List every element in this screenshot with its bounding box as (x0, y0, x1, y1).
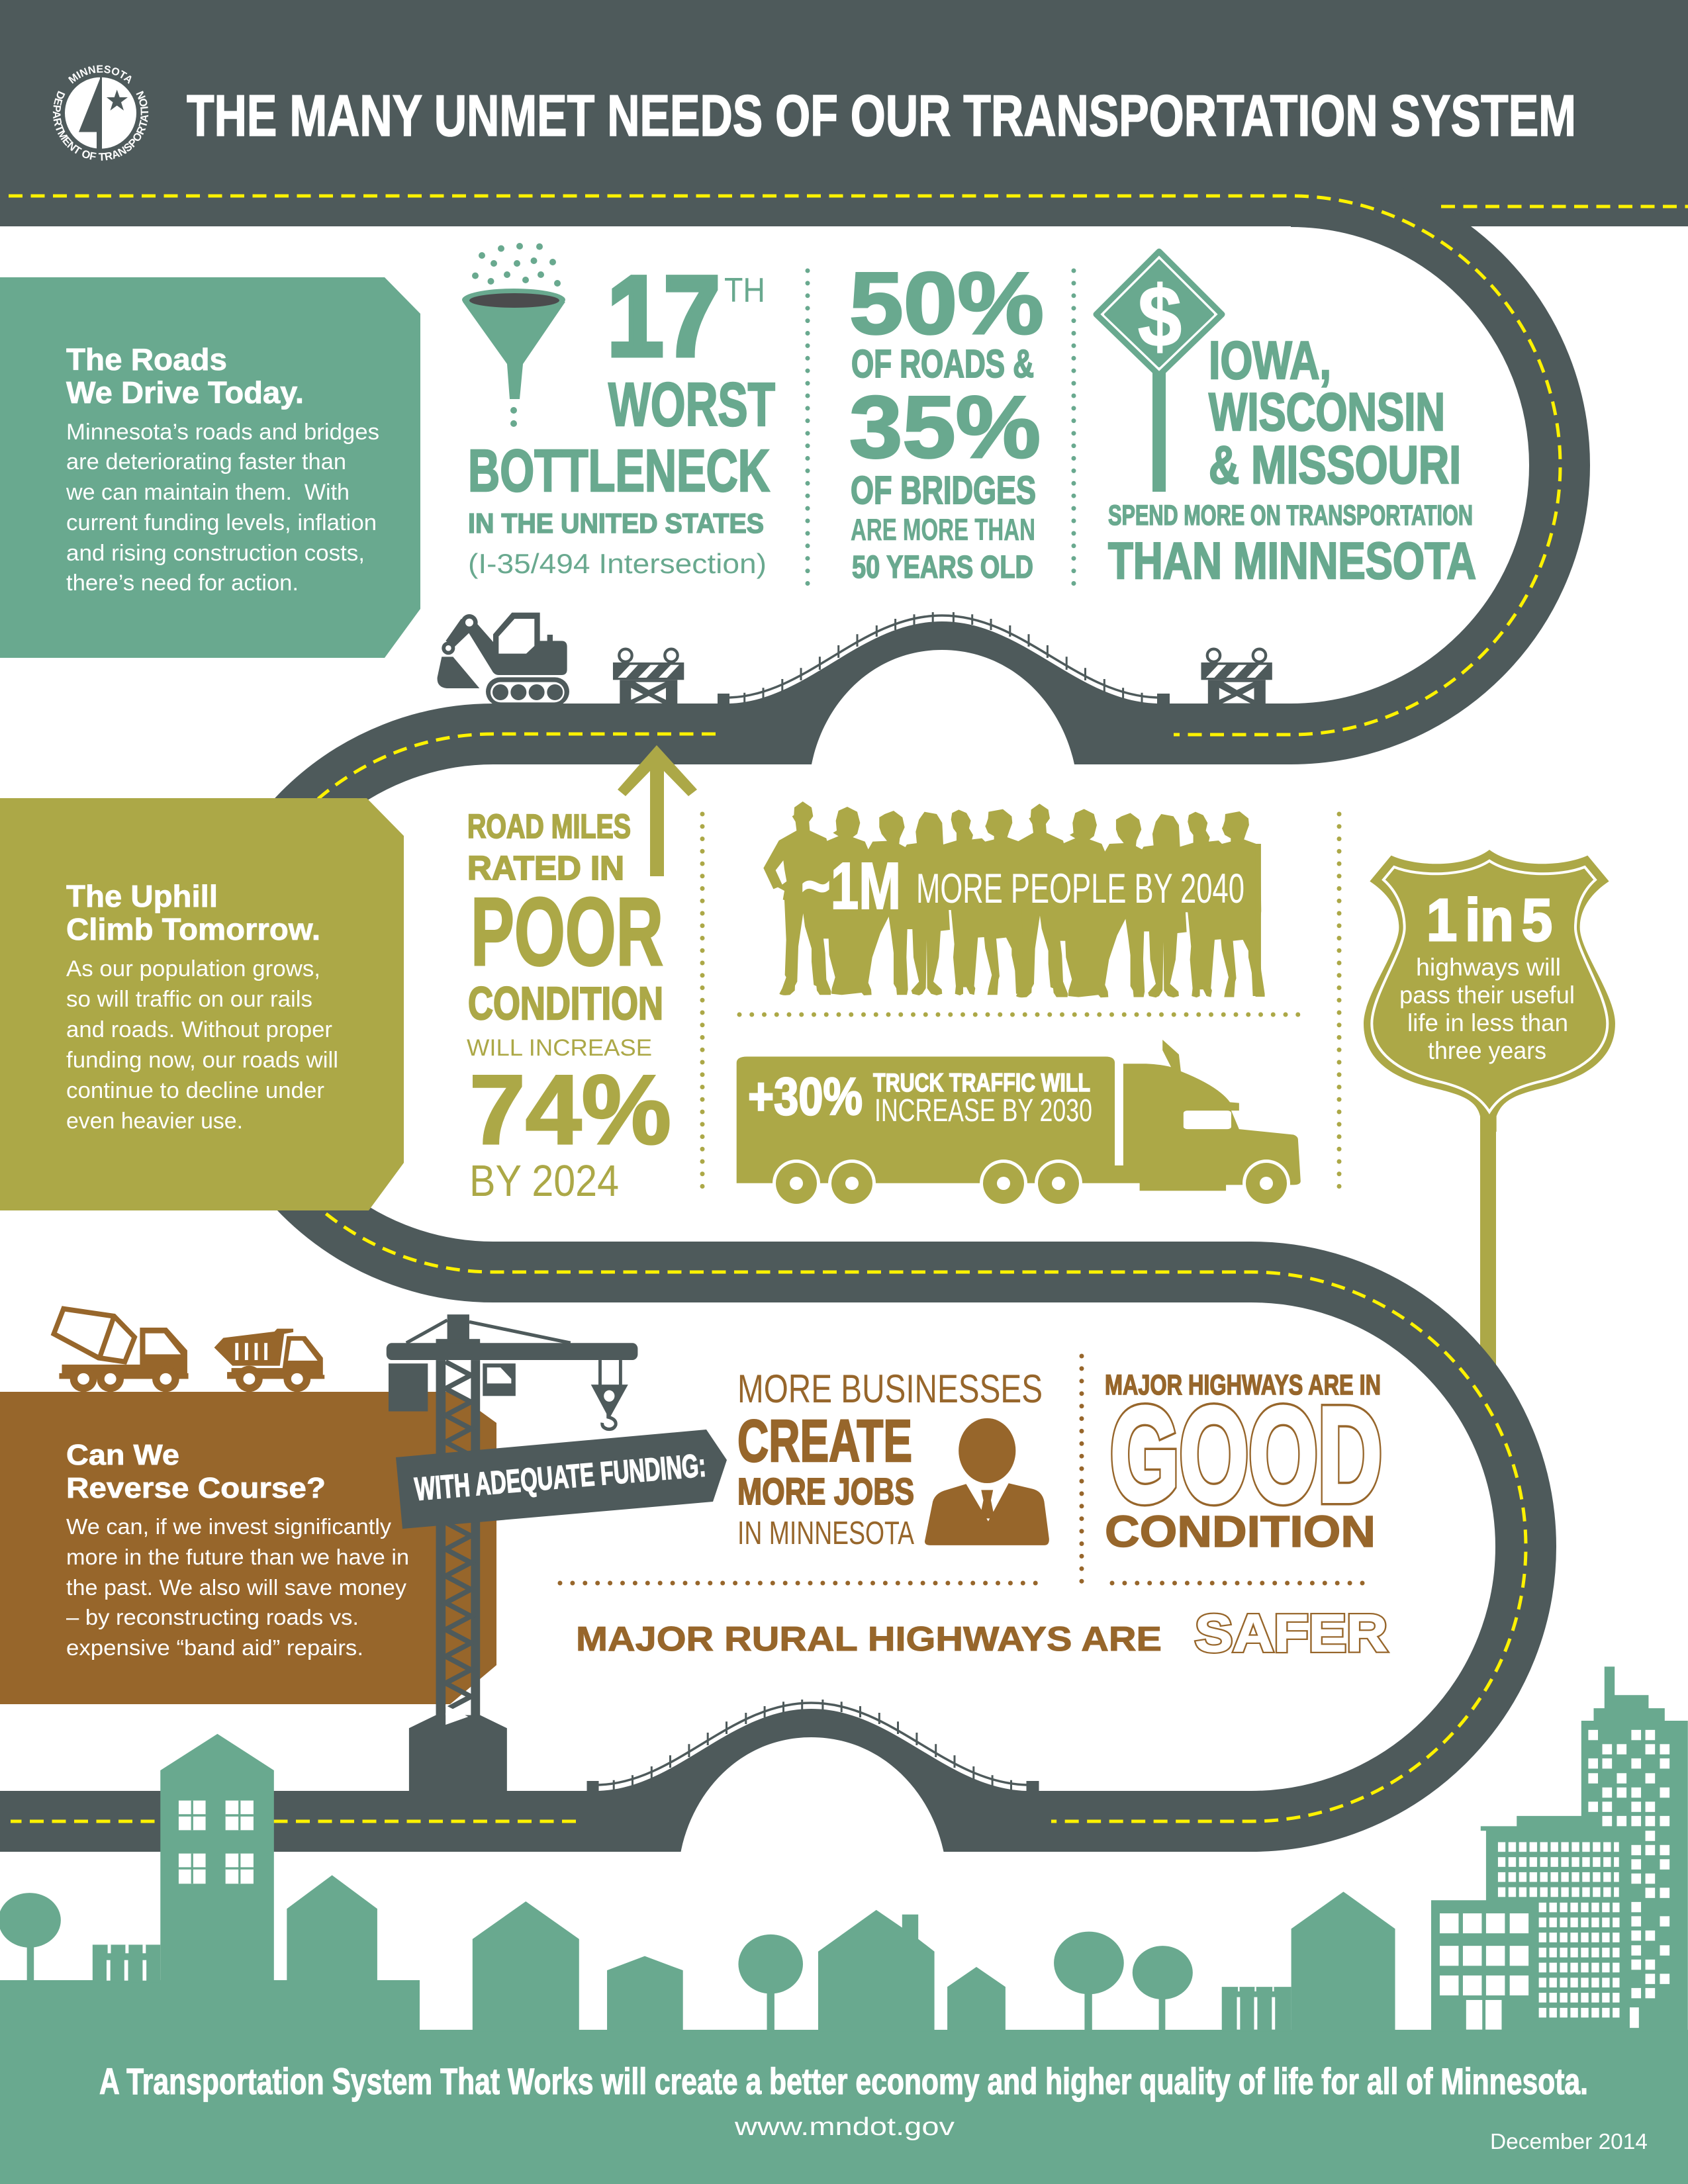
logo: Minnesota Department of Transportation: DEPARTMENT OF TRANSPORTATION (53, 91, 148, 161)
panel body text: current funding levels, inflation (66, 510, 377, 535)
panel heading: Climb Tomorrow. (66, 912, 320, 946)
tall house (160, 1734, 274, 1983)
stat: Iowa, Wisconsin and Missouri (1108, 331, 1476, 590)
skyline: right houses, trees and towers (818, 1666, 1688, 2031)
stat: major highways in good condition: MAJOR HIGHWAYS ARE IN (1105, 1369, 1381, 1401)
house (1291, 1891, 1395, 2031)
stat: major rural highways are safer (576, 1604, 1387, 1662)
crowd silhouette (763, 801, 1265, 997)
stat: more businesses create more jobs: MORE BUSINESSES (737, 1367, 1043, 1411)
panel body text: Minnesota’s roads and bridges (66, 420, 379, 445)
icon: crowd of people with population stat: MORE PEOPLE BY 2040 (916, 866, 1244, 912)
stat: road miles rated in poor condition: ROAD MILES (467, 807, 631, 845)
icon: interstate shield sign: 1 in 5 (1427, 887, 1552, 954)
icon: crowd of people with population stat: ~1M (801, 849, 901, 923)
panel heading (66, 879, 320, 946)
skyline: left houses and trees (0, 1734, 803, 2031)
header band (0, 0, 1688, 226)
icon: interstate shield sign: life in less than (1407, 1009, 1568, 1036)
icon: dollar road sign (1096, 251, 1222, 492)
stat: road miles rated in poor condition: BY 2024 (469, 1156, 619, 1206)
winding road (0, 197, 1560, 1821)
panel heading: Can We (66, 1439, 179, 1471)
icon: interstate shield sign: three years (1428, 1037, 1546, 1064)
panel body text: continue to decline under (66, 1078, 324, 1103)
stat: Iowa, Wisconsin and Missouri: IOWA, (1209, 331, 1331, 390)
stat: 50% of roads and 35% of bridges: OF ROADS & (851, 342, 1034, 386)
bridge two (586, 1700, 1039, 1852)
panel heading (66, 342, 304, 410)
highway sign pole (1480, 1112, 1496, 1370)
panel body text: expensive “band aid” repairs. (66, 1635, 363, 1660)
stat: 50% of roads and 35% of bridges (849, 255, 1044, 585)
stat: 17th worst bottleneck: 17 (607, 253, 720, 380)
stat: more businesses create more jobs (737, 1367, 1043, 1551)
outlined word good (1110, 1379, 1382, 1530)
panel heading (66, 1439, 326, 1504)
icon: construction crane (387, 1314, 637, 1795)
outlined word good: GOOD (1110, 1379, 1382, 1530)
house (947, 1967, 1006, 2031)
stat: 17th worst bottleneck: WORST (608, 370, 775, 439)
stat: 17th worst bottleneck: IN THE UNITED STATES (468, 508, 764, 539)
outlined word safer: SAFER (1195, 1604, 1387, 1662)
icon: interstate shield sign: highways will (1416, 954, 1561, 981)
panel body text: – by reconstructing roads vs. (66, 1605, 359, 1629)
stat: road miles rated in poor condition: POOR (471, 878, 663, 985)
panel body text: funding now, our roads will (66, 1048, 338, 1073)
stat: more businesses create more jobs: MORE JOBS (737, 1471, 914, 1513)
bridge one (718, 612, 1170, 764)
panel body text (66, 1514, 409, 1660)
tree (1054, 1932, 1124, 2031)
fence (93, 1944, 160, 1982)
tree (0, 1893, 61, 1981)
panel body text: and roads. Without proper (66, 1017, 332, 1042)
tree (738, 1934, 803, 2031)
stat: 50% of roads and 35% of bridges: 50 YEARS OLD (852, 550, 1033, 585)
panel body text: more in the future than we have in (66, 1545, 409, 1569)
stat: major highways in good condition (1105, 1369, 1382, 1557)
stat: major highways in good condition: CONDITION (1105, 1507, 1376, 1557)
stat: more businesses create more jobs: CREATE (737, 1408, 912, 1475)
icon: cement mixer truck (54, 1309, 189, 1392)
icon: interstate shield sign (1364, 850, 1615, 1132)
stat: Iowa, Wisconsin and Missouri: SPEND MORE ON TRANSPORTATION (1108, 500, 1473, 531)
stat: 17th worst bottleneck: BOTTLENECK (468, 438, 770, 504)
panel body text: As our population grows, (66, 956, 320, 981)
panel: the uphill climb tomorrow (0, 798, 404, 1210)
panel heading: The Uphill (66, 879, 218, 913)
panel body text: so will traffic on our rails (66, 987, 312, 1012)
stat: road miles rated in poor condition: WILL INCREASE (467, 1035, 652, 1061)
panel body text: are deteriorating faster than (66, 449, 346, 475)
stat: road miles rated in poor condition: RATED IN (467, 849, 624, 887)
footer ground and skyline base (0, 1980, 1688, 2184)
tree (1133, 1946, 1193, 2031)
house with chimney (818, 1910, 935, 2031)
fence (1222, 1987, 1291, 2031)
house (607, 1956, 683, 2031)
house (473, 1901, 579, 2031)
trailer and cab (737, 1040, 1301, 1191)
icon: dump truck (214, 1329, 324, 1392)
stat: 50% of roads and 35% of bridges: ARE MORE THAN (851, 512, 1035, 547)
arrow: rising poor road miles (618, 745, 697, 876)
stat: 50% of roads and 35% of bridges: 35% (849, 379, 1041, 477)
panel body text: and rising construction costs, (66, 541, 365, 566)
panel body text: the past. We also will save money (66, 1575, 407, 1600)
panel body text: there’s need for action. (66, 570, 299, 596)
sign: with adequate funding (396, 1430, 727, 1529)
panel body text: we can maintain them. With (66, 480, 350, 505)
road centre dashes (9, 196, 1688, 1821)
footer date: December 2014 (1490, 2129, 1648, 2154)
stat: road miles rated in poor condition: 74% (469, 1054, 671, 1165)
icon: semi truck with traffic stat: INCREASE BY 2030 (874, 1093, 1092, 1128)
stat: road miles rated in poor condition (467, 807, 671, 1206)
city buildings (1431, 1666, 1688, 2031)
stat: Iowa, Wisconsin and Missouri: WISCONSIN (1209, 383, 1445, 442)
icon: crowd of people with population stat (763, 801, 1265, 997)
icon: dollar road sign: $ (1138, 268, 1182, 365)
panel: the roads we drive today (0, 277, 420, 658)
outlined word safer: SAFER (1195, 1604, 1387, 1662)
icon: semi truck with traffic stat (737, 1040, 1301, 1207)
icon: road barricade left (613, 649, 684, 704)
icon: semi truck with traffic stat: TRUCK TRAFFIC WILL (873, 1069, 1090, 1097)
footer website: www.mndot.gov (734, 2113, 955, 2141)
panel heading: The Roads (66, 342, 227, 377)
stat: more businesses create more jobs: IN MINNESOTA (737, 1516, 914, 1551)
stat: Iowa, Wisconsin and Missouri: THAN MINNESOTA (1108, 531, 1476, 590)
panel: can we reverse course (0, 1392, 496, 1704)
stat: road miles rated in poor condition: CONDITION (468, 978, 663, 1029)
panel body text: We can, if we invest significantly (66, 1514, 392, 1539)
stat: 17th worst bottleneck (468, 253, 775, 579)
icon: interstate shield sign: pass their useful (1399, 981, 1575, 1009)
outlined word good: GOOD (1110, 1379, 1382, 1530)
logo: Minnesota Department of Transportation: MINNESOTA (68, 65, 132, 84)
house (287, 1875, 377, 1983)
icon: semi truck with traffic stat: +30% (748, 1067, 863, 1126)
panel body text (66, 956, 338, 1134)
panel body text (66, 420, 379, 596)
icon: excavator (438, 613, 569, 706)
icon: funnel (462, 243, 565, 427)
stat: Iowa, Wisconsin and Missouri: & MISSOURI (1209, 435, 1461, 495)
stat: 17th worst bottleneck: (I-35/494 Intersection) (468, 548, 767, 579)
icon: businessman (925, 1418, 1049, 1545)
panel heading: Reverse Course? (66, 1472, 326, 1504)
stat: major rural highways are safer: MAJOR RURAL HIGHWAYS ARE (576, 1620, 1162, 1659)
wheels (773, 1160, 1290, 1207)
panel heading: We Drive Today. (66, 375, 304, 410)
stat: 17th worst bottleneck: TH (724, 271, 765, 310)
stat: 50% of roads and 35% of bridges: OF BRIDGES (851, 469, 1036, 512)
sign: with adequate funding: WITH ADEQUATE FUNDING: (413, 1447, 707, 1508)
panel body text: even heavier use. (66, 1109, 243, 1134)
icon: road barricade right (1201, 649, 1272, 704)
stat: 50% of roads and 35% of bridges: 50% (849, 255, 1044, 353)
